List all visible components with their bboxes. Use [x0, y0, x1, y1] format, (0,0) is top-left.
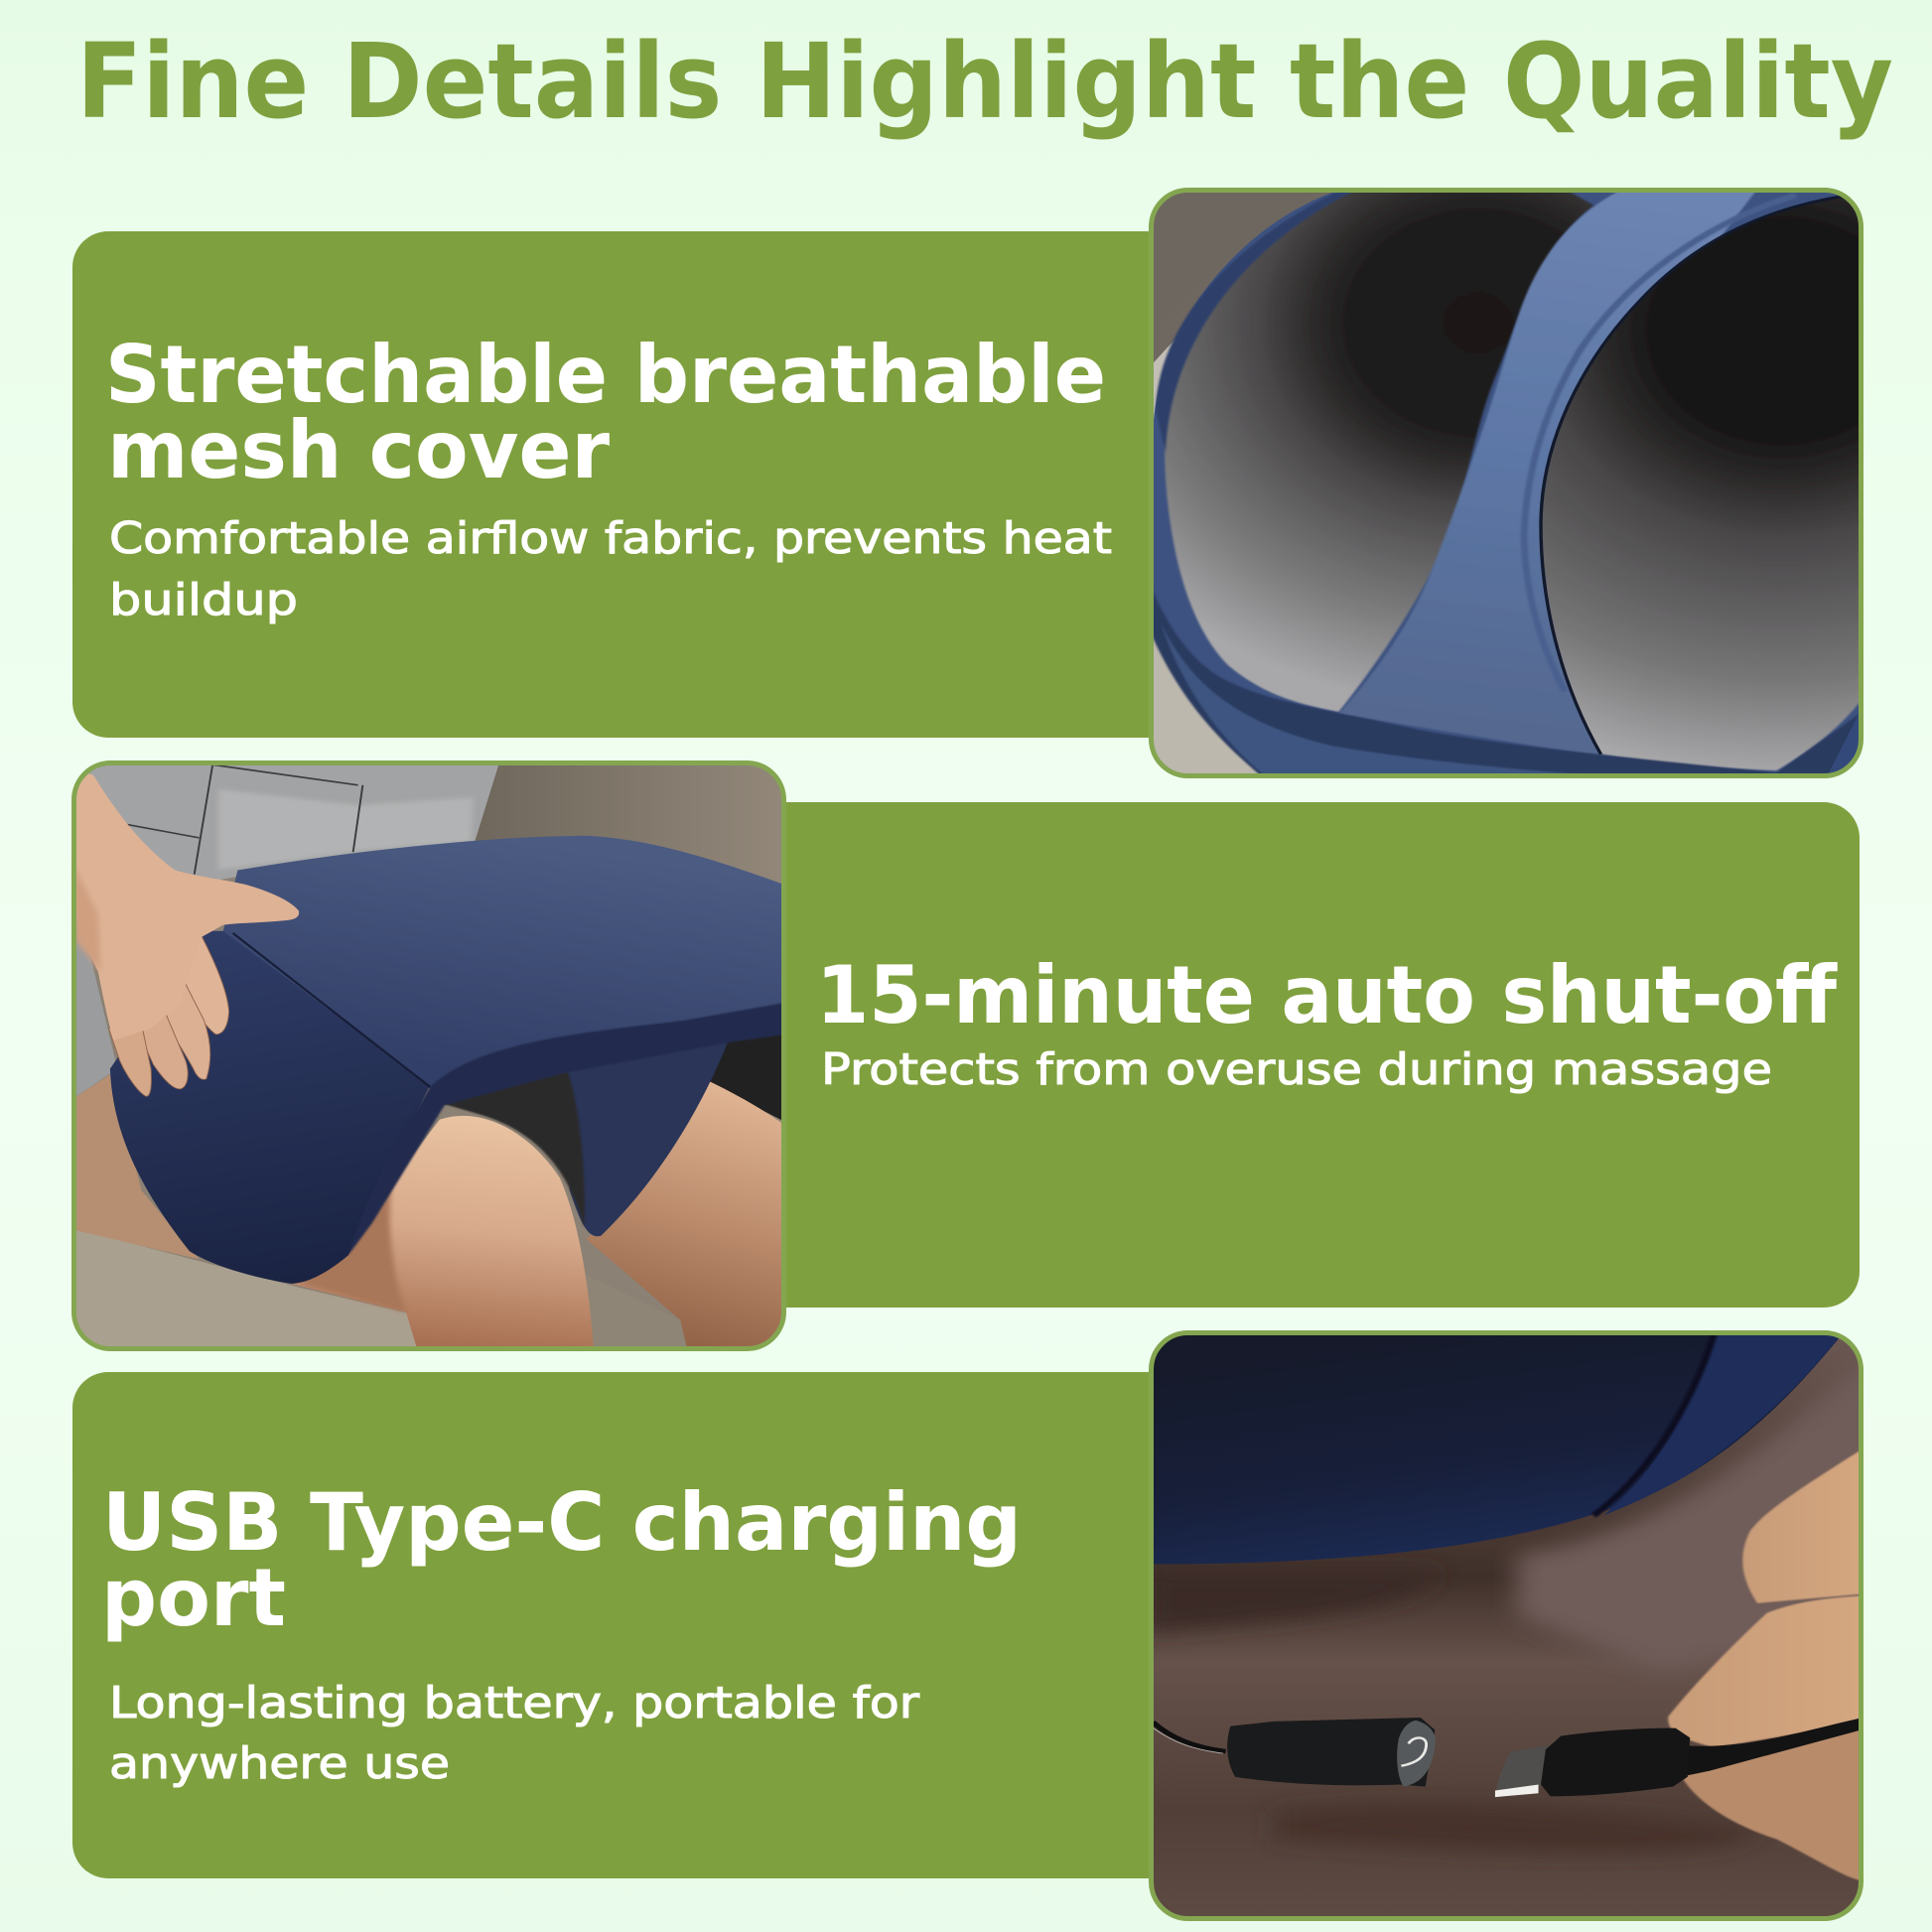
panel: auto shut-off	[695, 802, 1860, 1308]
heading: auto shut-off: 15-minute auto shut-off	[816, 949, 1838, 1041]
photo: massager cushions close-up	[1149, 188, 1863, 778]
panel: stretchable breathable mesh cover	[72, 231, 1241, 738]
description: charging port: Long-lasting battery, portable for	[109, 1678, 920, 1728]
heading: mesh cover: Stretchable breathable	[105, 329, 1106, 421]
right dark cushion	[711, 1035, 781, 1120]
left dark cushion	[435, 1071, 585, 1227]
knee	[291, 1116, 595, 1360]
heading: mesh cover	[105, 329, 1106, 496]
panel: usb type-c charging port	[72, 1372, 1241, 1878]
photo: massager on thighs	[71, 760, 786, 1351]
front panel	[110, 931, 430, 1284]
heading: charging port: port	[101, 1552, 286, 1644]
hand	[74, 768, 299, 1096]
usb plug cable	[1688, 1719, 1859, 1775]
top panel	[223, 836, 800, 1089]
far-left thigh	[69, 1073, 200, 1259]
inner tube	[560, 1040, 729, 1236]
dark band	[348, 1000, 800, 1255]
massager shell	[1147, 185, 1886, 784]
right leg	[587, 1082, 781, 1346]
heading: mesh cover: mesh cover	[107, 404, 611, 496]
fingers	[1742, 1446, 1868, 1603]
lower rim	[1154, 592, 1859, 773]
description: charging port	[109, 1678, 920, 1789]
right cushion	[1541, 193, 1868, 770]
sofa	[76, 1231, 417, 1346]
description: charging port: anywhere use	[109, 1738, 450, 1789]
port housing	[1153, 1723, 1226, 1751]
description: auto shut-off: Protects from overuse during massage	[821, 1044, 1772, 1095]
description: mesh cover: Comfortable airflow fabric, prevents heat	[109, 513, 1112, 564]
centre band	[1338, 189, 1757, 757]
massager body	[1147, 1332, 1844, 1565]
left cushion	[1165, 189, 1593, 712]
heading: charging port: USB Type-C charging	[102, 1476, 1022, 1569]
heading: charging port	[101, 1476, 1022, 1644]
band inner seam	[1524, 196, 1796, 692]
photo: usb-c cable and port	[1132, 1320, 1886, 1932]
description: mesh cover	[109, 513, 1112, 625]
skirt	[78, 760, 500, 883]
description: mesh cover: buildup	[109, 575, 298, 625]
plug tip	[1496, 1745, 1548, 1791]
plug housing	[1541, 1728, 1690, 1796]
